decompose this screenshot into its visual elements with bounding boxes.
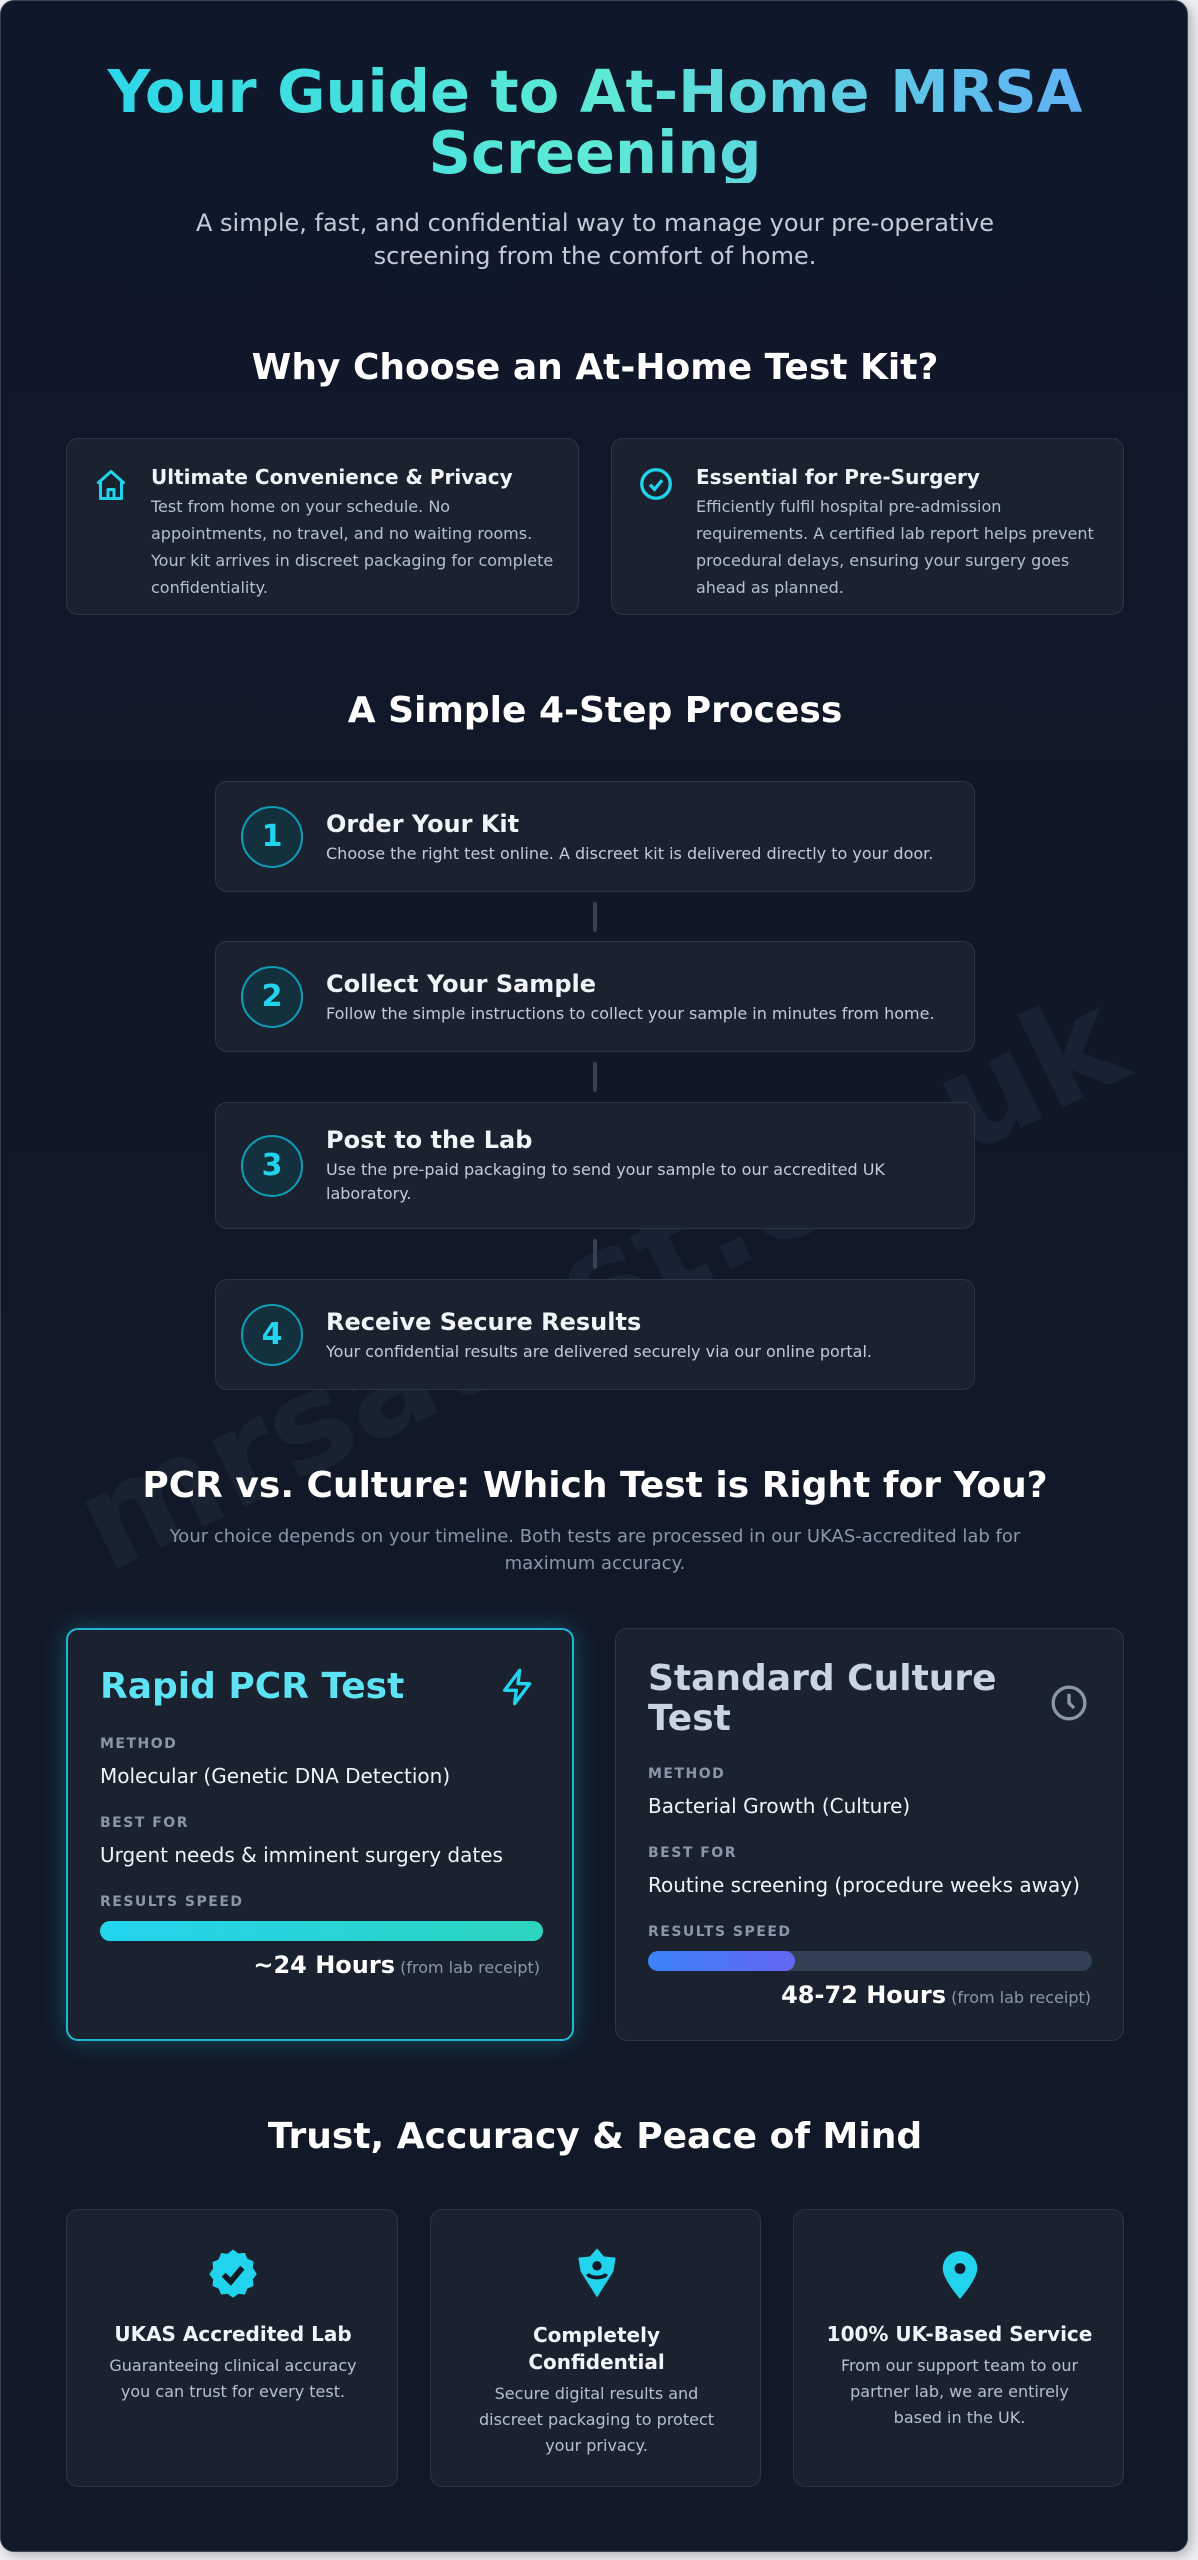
step 3: Use the pre-paid packaging to send your sample to our accredited UK laboratory. bbox=[326, 1160, 885, 1203]
panel: rapid PCR: METHOD bbox=[100, 1736, 177, 1752]
step 4: Receive Secure Results bbox=[326, 1308, 641, 1336]
panel: UK based: 100% UK-Based Service bbox=[827, 2322, 1092, 2346]
panel: UKAS: Guaranteeing clinical accuracy you can trust for every test. bbox=[109, 2356, 357, 2401]
panel: rapid PCR: Molecular (Genetic DNA Detection) bbox=[100, 1764, 450, 1788]
title: Screening bbox=[428, 118, 762, 187]
panel: standard culture: RESULTS SPEED bbox=[648, 1924, 792, 1940]
icon: clock bbox=[1052, 1686, 1086, 1720]
arrow: connector 2 bbox=[593, 1062, 597, 1092]
heading: culture bbox=[648, 1658, 997, 1739]
watermark: mrsatest.co.uk bbox=[53, 961, 1147, 1602]
subtitle: screening from the comfort of home. bbox=[374, 242, 816, 270]
icon: house bbox=[96, 470, 126, 500]
step 3 bbox=[215, 1102, 975, 1229]
panel: standard culture: BEST FOR bbox=[648, 1845, 737, 1861]
title bbox=[1, 61, 1189, 183]
panel: confidential bbox=[430, 2209, 761, 2487]
text: 24 hours: ~24 Hours (from lab receipt) bbox=[253, 1951, 540, 1979]
panel: convenience bbox=[66, 438, 579, 615]
panel: UK based: From our support team to our partner lab, we are entirely based in the UK. bbox=[841, 2356, 1078, 2427]
panel: standard culture: Routine screening (procedure weeks away) bbox=[648, 1873, 1080, 1897]
step 2: Collect Your Sample bbox=[326, 970, 596, 998]
panel: UK based bbox=[793, 2209, 1124, 2487]
step 2 bbox=[215, 941, 975, 1052]
icon: badge check bbox=[209, 2250, 257, 2298]
step 4: Your confidential results are delivered securely via our online portal. bbox=[326, 1342, 872, 1361]
icon: shield user bbox=[578, 2248, 616, 2298]
panel: UKAS: UKAS Accredited Lab bbox=[114, 2322, 352, 2346]
panel: confidential: Confidential bbox=[528, 2350, 665, 2374]
step 1: Order Your Kit bbox=[326, 810, 519, 838]
heading: PCR vs culture: PCR vs. Culture: Which Test is Right for You? bbox=[142, 1465, 1048, 1506]
panel: rapid PCR: Urgent needs & imminent surgery dates bbox=[100, 1843, 503, 1867]
panel: standard culture bbox=[615, 1628, 1124, 2041]
icon: lightning bbox=[502, 1668, 532, 1706]
bar: culture speed bbox=[648, 1951, 1092, 1971]
subtitle: comparison: Your choice depends on your timeline. Both tests are processed in our UKAS-accredited lab for maximum accuracy. bbox=[170, 1526, 1020, 1574]
subtitle bbox=[196, 209, 994, 270]
panel: UKAS bbox=[66, 2209, 398, 2487]
step 1 bbox=[215, 781, 975, 892]
title: Your Guide to At-Home MRSA bbox=[108, 57, 1082, 126]
step 4: 4 bbox=[262, 1317, 282, 1352]
step 3: Post to the Lab bbox=[326, 1126, 532, 1154]
panel: rapid PCR bbox=[66, 1628, 574, 2041]
heading: rapid PCR: Rapid PCR Test bbox=[100, 1666, 404, 1707]
heading: culture: Standard Culture bbox=[648, 1658, 997, 1699]
heading: culture: Test bbox=[648, 1698, 731, 1739]
panel: pre-surgery bbox=[611, 438, 1124, 615]
bar: PCR speed bbox=[100, 1921, 543, 1941]
panel: standard culture: Bacterial Growth (Culture) bbox=[648, 1794, 910, 1818]
arrow: connector 3 bbox=[593, 1239, 597, 1269]
step 3: 3 bbox=[262, 1148, 282, 1183]
panel: standard culture: METHOD bbox=[648, 1766, 725, 1782]
text: pre-surgery: Essential for Pre-Surgery bbox=[696, 465, 980, 489]
panel: confidential: Secure digital results and discreet packaging to protect your privacy. bbox=[479, 2384, 714, 2455]
panel: rapid PCR: BEST FOR bbox=[100, 1815, 189, 1831]
heading: why choose: Why Choose an At-Home Test Kit? bbox=[252, 347, 938, 388]
heading: trust: Trust, Accuracy & Peace of Mind bbox=[268, 2116, 922, 2157]
step 2: 2 bbox=[262, 979, 282, 1014]
arrow: connector 1 bbox=[593, 902, 597, 932]
subtitle: A simple, fast, and confidential way to manage your pre-operative bbox=[196, 209, 994, 237]
step 1: 1 bbox=[262, 819, 282, 854]
step 2: Follow the simple instructions to collect your sample in minutes from home. bbox=[326, 1004, 935, 1023]
panel: confidential: Completely bbox=[533, 2323, 660, 2347]
text: convenience: Test from home on your schedule. No appointments, no travel, and no waiting rooms. Your kit arrives in discreet packaging for complete confidentiality. bbox=[151, 497, 553, 597]
panel: rapid PCR: RESULTS SPEED bbox=[100, 1894, 244, 1910]
icon: check circle bbox=[640, 468, 672, 500]
step 1: Choose the right test online. A discreet kit is delivered directly to your door. bbox=[326, 844, 933, 863]
text: pre-surgery: Efficiently fulfil hospital pre-admission requirements. A certified lab report helps prevent procedural delays, ensuring your surgery goes ahead as planned. bbox=[696, 497, 1094, 597]
heading: 4-step: A Simple 4-Step Process bbox=[348, 690, 842, 731]
text: 48-72 hours: 48-72 Hours (from lab receipt) bbox=[781, 1981, 1091, 2009]
text: convenience: Ultimate Convenience & Privacy bbox=[151, 465, 513, 489]
icon: location pin bbox=[942, 2251, 978, 2299]
step 4 bbox=[215, 1279, 975, 1390]
